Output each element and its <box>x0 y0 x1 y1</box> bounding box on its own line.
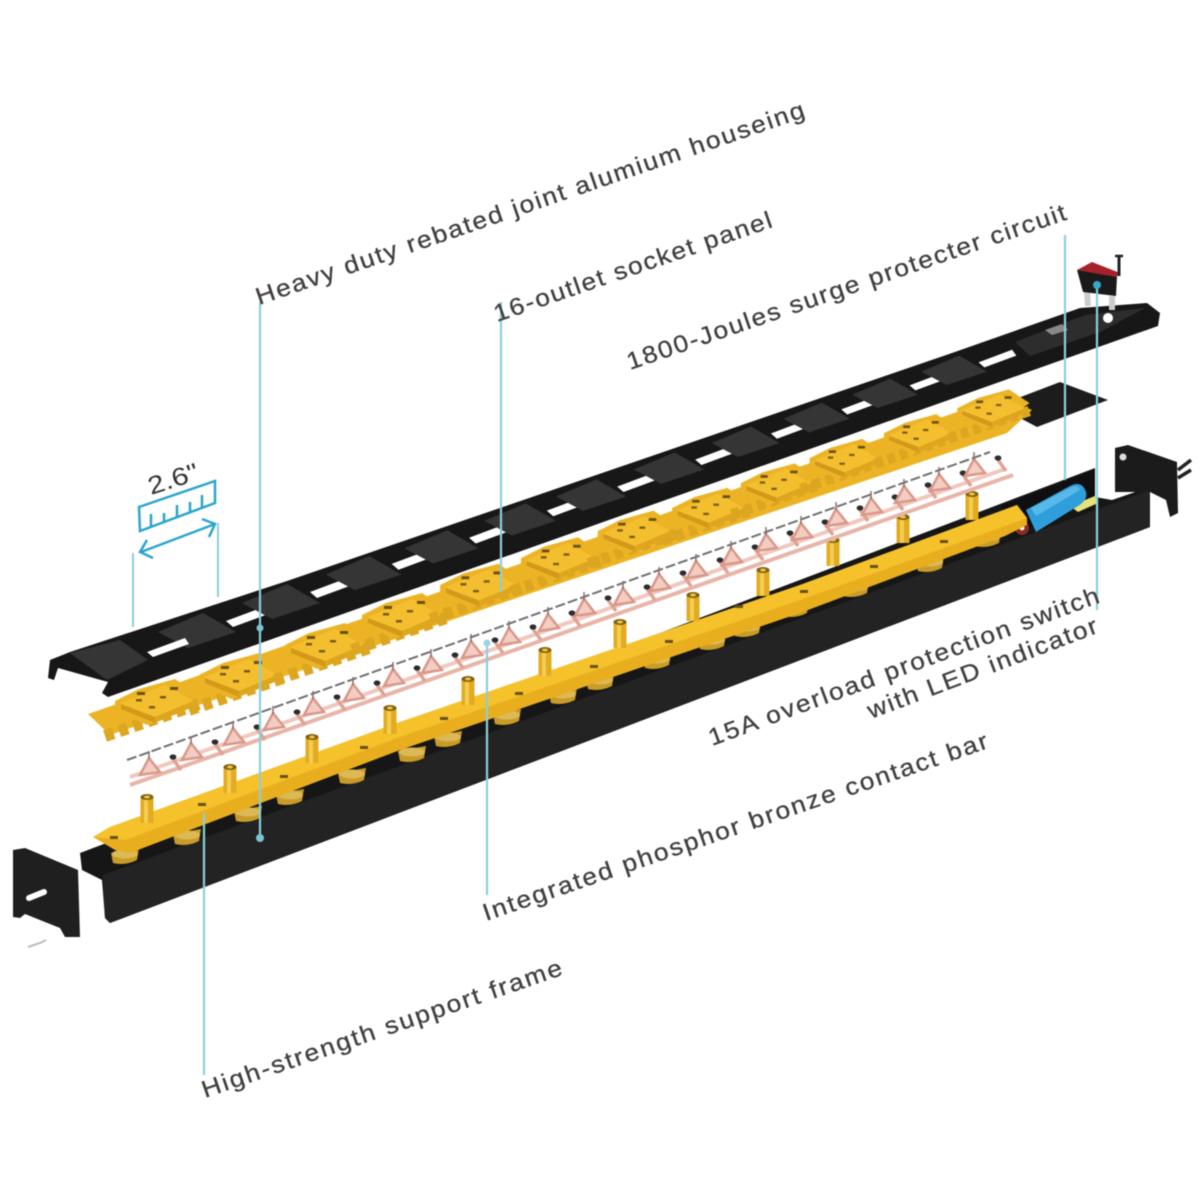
label: housing: Heavy duty rebated joint alumium houseing <box>252 97 808 310</box>
dimension callout: 2.6 inch outlet spacing <box>133 458 218 627</box>
label: socket panel: 16-outlet socket panel <box>490 207 776 327</box>
leader lines <box>204 235 1101 1075</box>
dimension value: 2.6" <box>144 458 202 501</box>
black tail plate of socket panel <box>1013 382 1108 427</box>
housing: black aluminium base channel <box>13 445 1191 947</box>
label: overload switch line two: with LED indicator <box>863 613 1101 725</box>
label: contact bar: Integrated phosphor bronze contact bar <box>479 728 991 926</box>
label: support frame: High-strength support frame <box>198 955 566 1103</box>
phosphor bronze contact bar <box>127 452 1013 785</box>
yellow 16-outlet socket panel <box>88 389 1032 736</box>
yellow support frame bar <box>93 491 1027 853</box>
right end cap <box>1115 445 1191 517</box>
label: surge circuit: 1800-Joules surge protecter circuit <box>623 199 1070 375</box>
capacitor and circuit board <box>1000 470 1098 535</box>
ruler icon <box>139 481 215 531</box>
rocker switch with LED <box>1077 256 1123 310</box>
pins <box>140 491 978 823</box>
double arrow <box>140 519 215 558</box>
label: overload switch line one: 15A overload protection switch <box>705 582 1103 751</box>
contact bar feet <box>111 531 1001 864</box>
top cover: aluminium housing with socket openings <box>48 303 1160 697</box>
left end cap <box>13 848 80 937</box>
